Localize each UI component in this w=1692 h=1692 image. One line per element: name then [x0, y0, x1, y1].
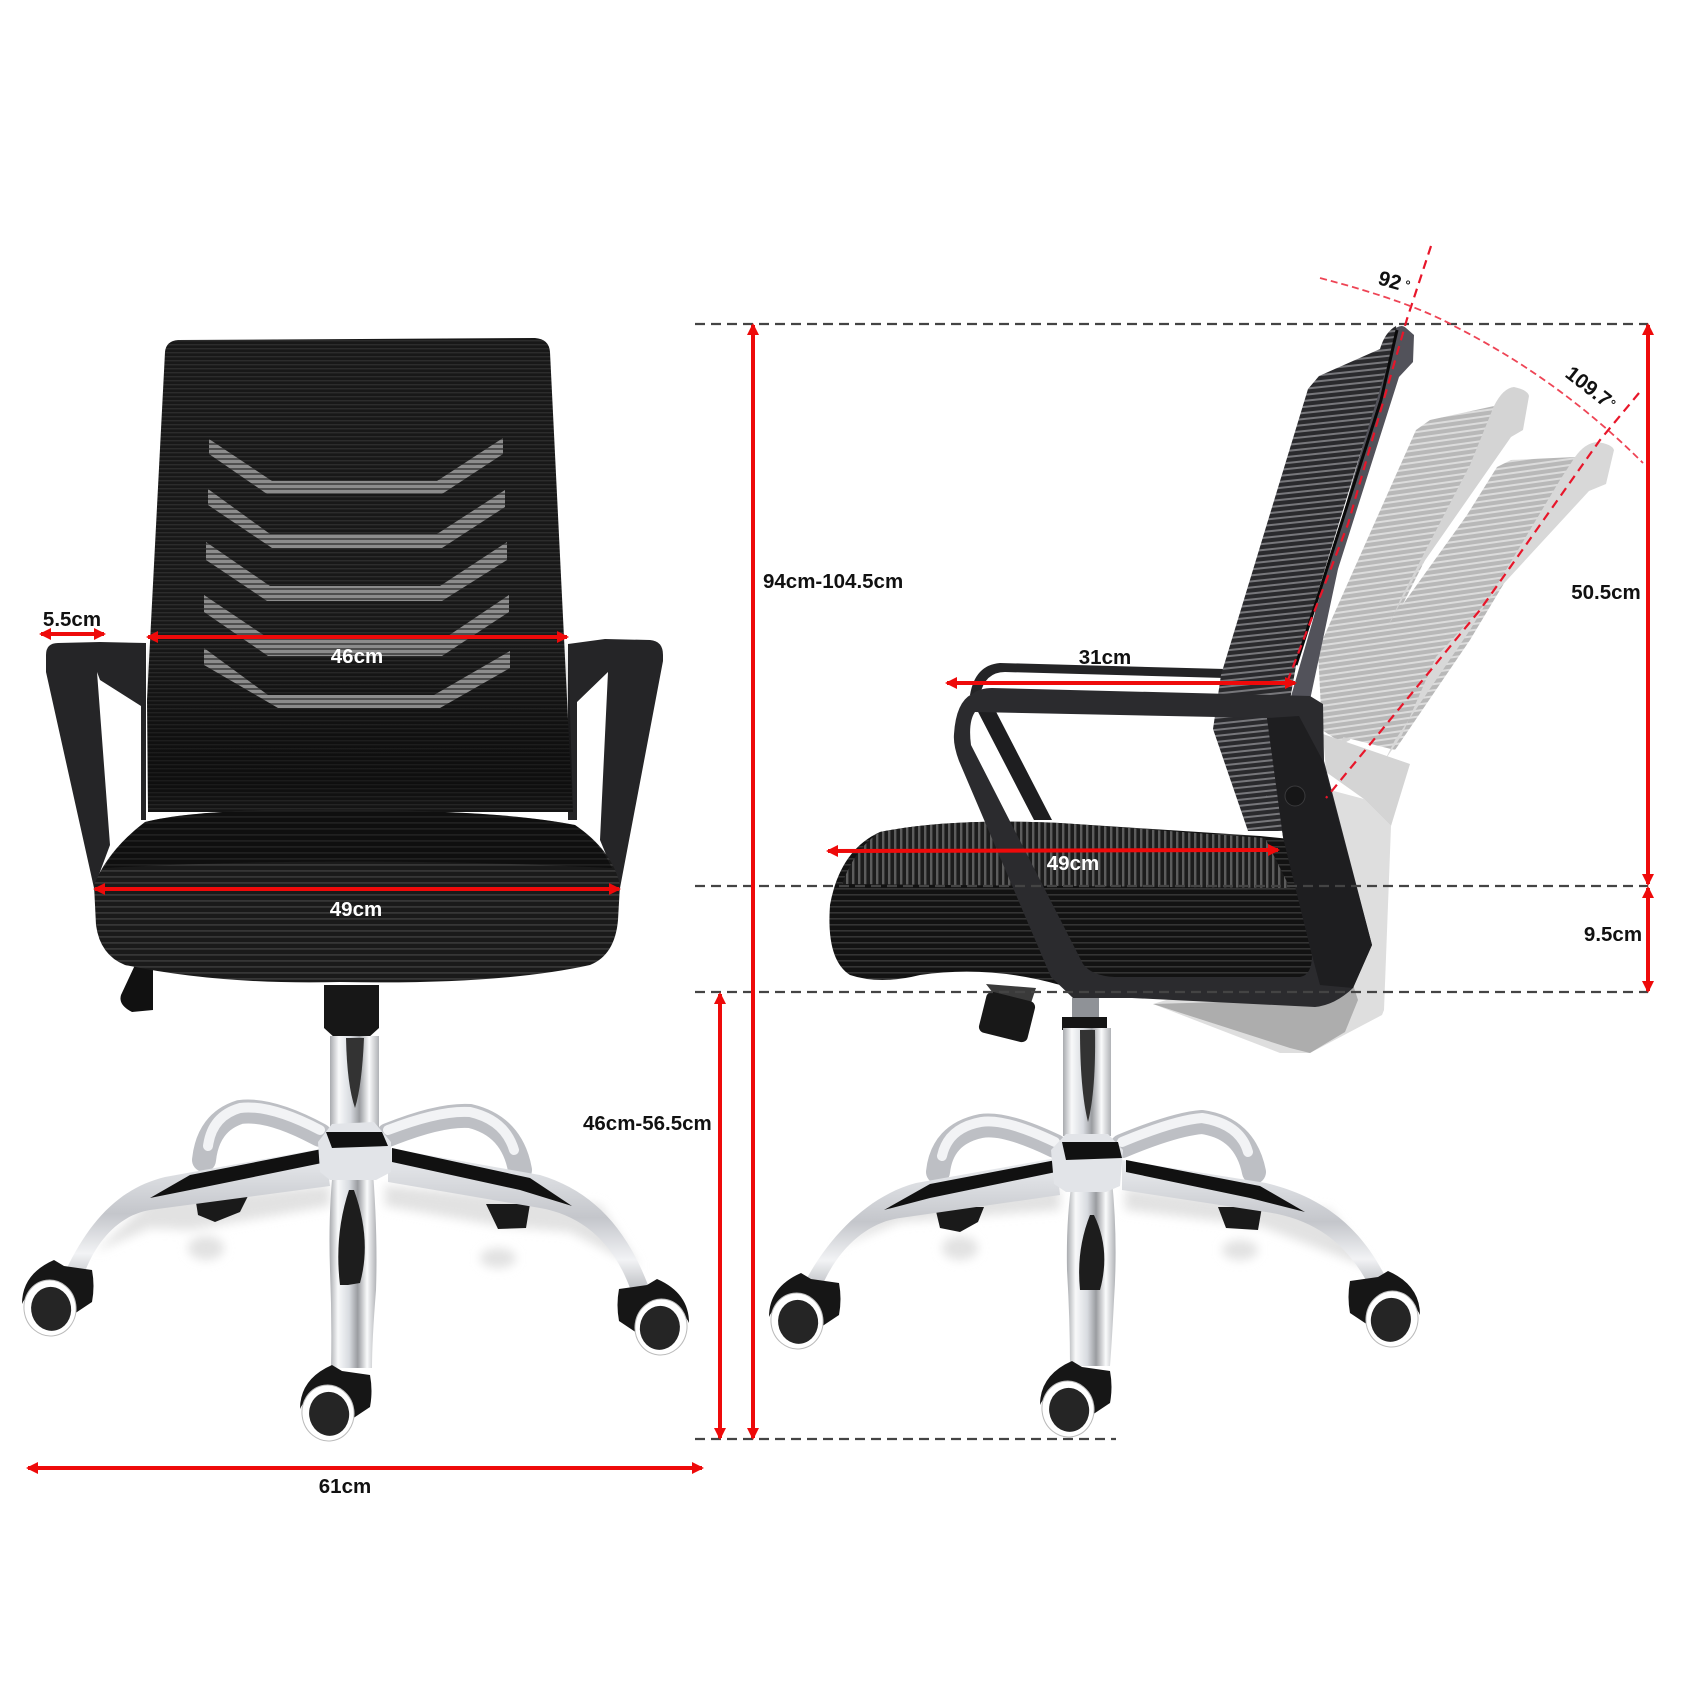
dimension: 94cm-104.5cm total height: 94cm-104.5cm — [763, 570, 903, 593]
seat cushion — [94, 810, 620, 982]
side view chair — [767, 326, 1614, 1440]
side hub — [1051, 1134, 1123, 1192]
floor shadow side — [835, 1188, 1375, 1270]
ghost backrest 2 — [1335, 442, 1614, 760]
side left leg — [806, 1158, 1060, 1286]
left front leg — [66, 1148, 330, 1280]
side gas lift — [1062, 998, 1111, 1136]
right front leg — [388, 1148, 648, 1288]
casters side view — [767, 1271, 1422, 1440]
dimension: 9.5cm arm height — [1584, 888, 1648, 991]
far arm — [970, 663, 1225, 820]
dimension: 49cm seat width: 49cm — [330, 898, 382, 921]
angle label 92 degrees: ° — [1403, 277, 1412, 293]
side left leg streak — [884, 1160, 1056, 1210]
near arm frame shading — [1267, 716, 1372, 988]
front view chair — [20, 338, 691, 1444]
hub — [318, 1122, 391, 1180]
dimension: 31cm arm length: 31cm — [1079, 646, 1131, 669]
ghost bracket — [1323, 734, 1410, 826]
side backrest mesh — [1213, 326, 1397, 831]
side back legs — [938, 1118, 1254, 1172]
dimension: 46cm back width: 46cm — [331, 645, 383, 668]
left armrest — [46, 642, 146, 888]
side seat cushion — [829, 822, 1340, 1000]
floor shadow — [95, 1185, 640, 1268]
angle label 92 degrees: 92 — [1376, 267, 1404, 295]
side hub collar — [1062, 1142, 1122, 1160]
dimension: 50.5cm back height: 50.5cm — [1571, 581, 1641, 604]
seat top shade — [104, 810, 612, 868]
casters front view — [20, 1260, 691, 1444]
swivel lever — [120, 965, 153, 1012]
dimension: 49cm seat depth: 49cm — [1047, 852, 1099, 875]
dimension: 61cm base width: 61cm — [319, 1475, 371, 1498]
hub collar — [326, 1132, 388, 1148]
backrest chevron stripes — [204, 438, 510, 708]
column reflection — [346, 1038, 364, 1108]
tilt button — [1285, 786, 1305, 806]
knob threads and adjustment knob — [978, 984, 1036, 1043]
centre leg dark reflection — [338, 1190, 365, 1285]
reference dashed lines — [695, 324, 1648, 1439]
backrest — [147, 338, 573, 812]
angle label 109.7 degrees: 109.7 — [1561, 362, 1616, 412]
right armrest — [568, 639, 663, 888]
gas lift sleeve — [324, 985, 379, 1038]
rear casters — [195, 1196, 530, 1229]
side right leg streak — [1126, 1160, 1305, 1212]
centre front leg — [330, 1160, 376, 1368]
ghost seat shade — [1153, 960, 1358, 1053]
ghost recline lower — [1153, 790, 1391, 1053]
backrest lower shade — [147, 640, 573, 812]
ghost backrest 1 — [1318, 387, 1529, 745]
side rear casters — [935, 1207, 1262, 1232]
dimension: 5.5cm arm width: 5.5cm — [43, 608, 101, 631]
dimension: 46cm-56.5cm seat height: 46cm-56.5cm — [583, 1112, 712, 1135]
near arm and frame — [954, 688, 1372, 1007]
angle label 109.7 degrees: ° — [1605, 396, 1619, 411]
dimension: 9.5cm arm height: 9.5cm — [1584, 923, 1642, 946]
side centre reflection — [1079, 1215, 1104, 1290]
right leg streak — [392, 1148, 572, 1206]
side centre leg — [1067, 1180, 1116, 1366]
side backrest rear frame — [1290, 326, 1414, 700]
backrest black seam — [1296, 330, 1397, 665]
recline angle guides — [1288, 246, 1643, 798]
left leg streak — [150, 1149, 322, 1198]
gas lift column — [330, 1036, 379, 1136]
base back legs — [204, 1107, 520, 1170]
side right leg — [1122, 1160, 1386, 1284]
